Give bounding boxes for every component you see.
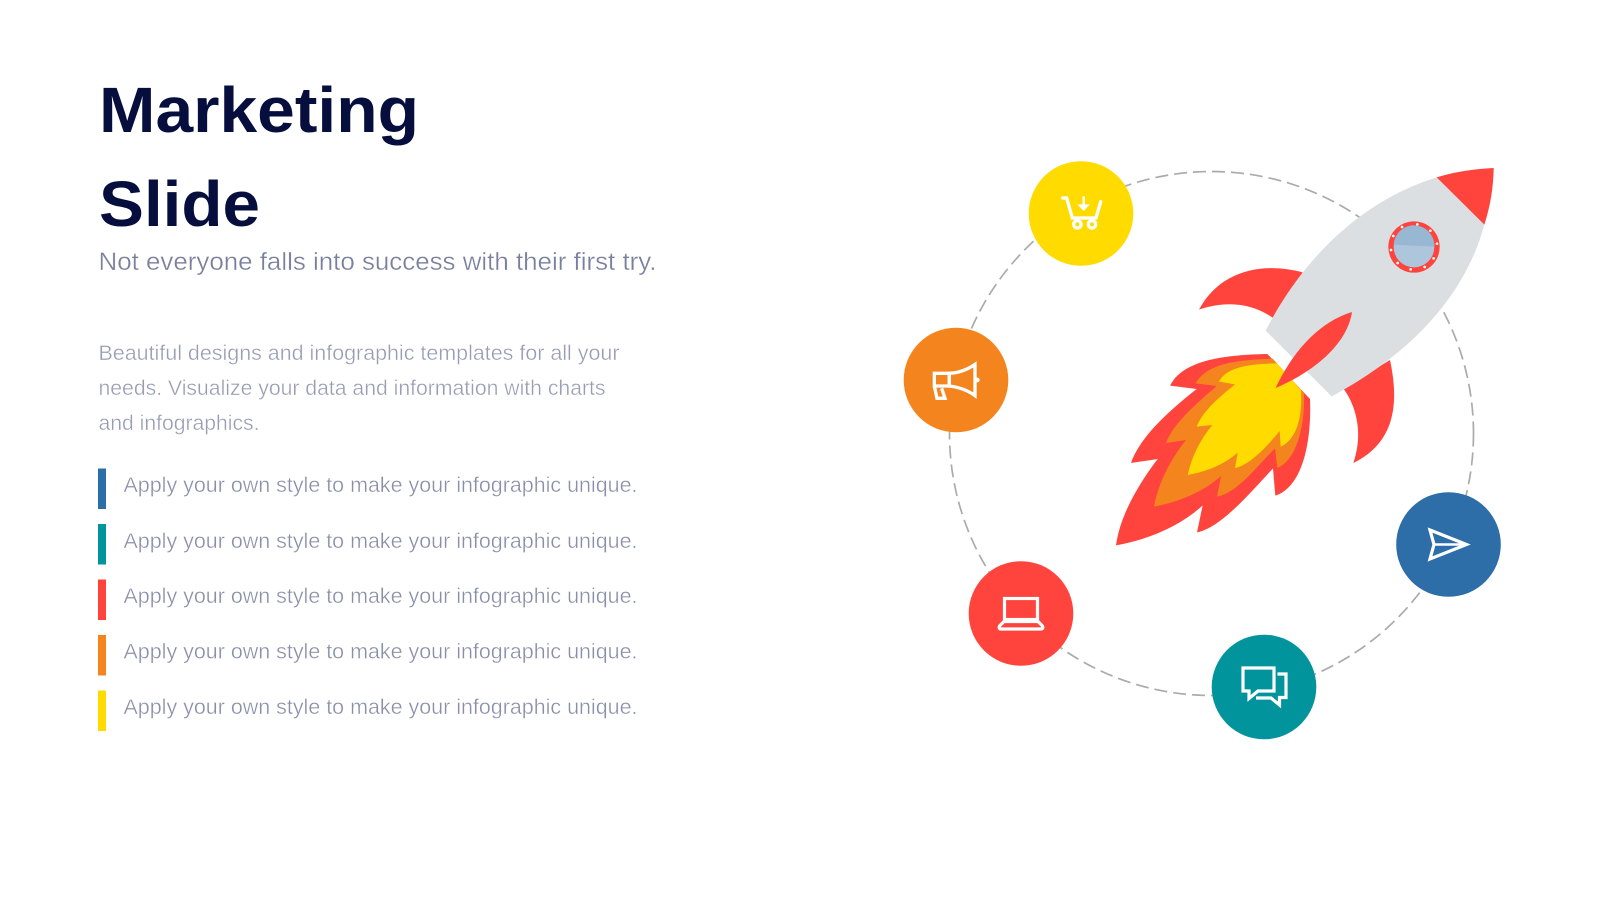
title: Marketing bbox=[99, 74, 419, 146]
rocket upper fin bbox=[1199, 268, 1303, 319]
title bbox=[99, 74, 419, 240]
icon badge: shopping cart bbox=[1029, 161, 1133, 266]
body paragraph: and infographics. bbox=[98, 412, 260, 435]
list item: red bbox=[98, 580, 638, 620]
rocket flame bbox=[1116, 354, 1310, 545]
body paragraph: Beautiful designs and infographic templates for all your bbox=[98, 342, 620, 365]
dashed orbit ring bbox=[950, 172, 1474, 696]
icon badge: paper plane bbox=[1396, 492, 1501, 597]
rocket illustration bbox=[1116, 168, 1494, 545]
body paragraph: needs. Visualize your data and information with charts bbox=[98, 377, 606, 400]
rocket body bbox=[1266, 177, 1484, 396]
icon badge: megaphone bbox=[904, 328, 1008, 432]
rocket centre fin bbox=[1276, 312, 1352, 388]
list item: blue: Apply your own style to make your infographic unique. bbox=[124, 474, 638, 497]
rocket porthole bbox=[1388, 221, 1440, 273]
icon badge: laptop bbox=[969, 561, 1073, 666]
list item: orange bbox=[98, 635, 638, 676]
rocket lower fin bbox=[1343, 360, 1394, 463]
list item: orange: Apply your own style to make your infographic unique. bbox=[124, 640, 638, 664]
subtitle: Not everyone falls into success with their first try. bbox=[98, 248, 656, 276]
list item: teal: Apply your own style to make your infographic unique. bbox=[124, 530, 638, 553]
list item: red: Apply your own style to make your infographic unique. bbox=[124, 585, 638, 608]
body paragraph bbox=[98, 342, 620, 435]
rocket nose cone bbox=[1437, 168, 1494, 225]
list item: teal bbox=[98, 524, 638, 564]
list item: yellow: Apply your own style to make your infographic unique. bbox=[124, 696, 638, 719]
icon badge: chat bubbles bbox=[1212, 635, 1316, 739]
list item: blue bbox=[98, 468, 638, 509]
list item: yellow bbox=[98, 690, 638, 731]
list of key points bbox=[98, 468, 638, 731]
title: Slide bbox=[99, 168, 260, 240]
